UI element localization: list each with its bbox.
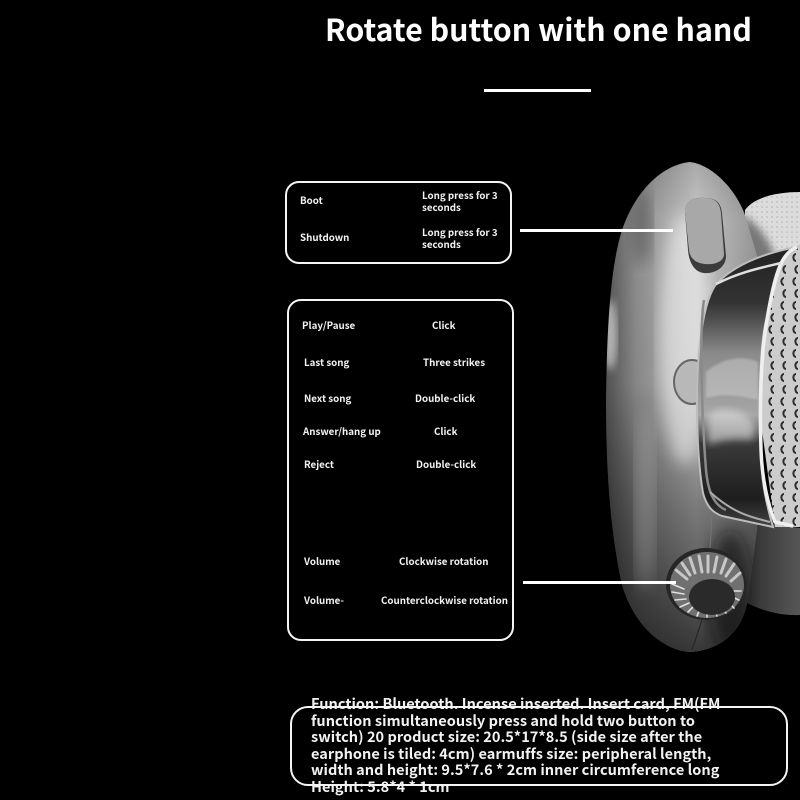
mesh grille	[758, 245, 800, 527]
label: volume up: Volume	[304, 554, 340, 568]
label: shutdown action: seconds	[422, 237, 461, 251]
label: boot: Boot	[300, 193, 323, 207]
action: click: Click	[432, 318, 455, 332]
text: specifications: earphone is tiled: 4cm) earmuffs size: peripheral length,	[311, 743, 711, 764]
text: specifications	[311, 693, 720, 797]
title underline	[484, 89, 591, 92]
rotary knob	[666, 548, 746, 620]
label: play/pause: Play/Pause	[302, 318, 355, 332]
pointer: rotary knob	[523, 581, 676, 584]
action: double-click: Double-click	[415, 391, 475, 405]
action: click: Click	[434, 424, 457, 438]
label: boot action: seconds	[422, 200, 461, 214]
text: specifications: switch) 20 product size: 20.5*17*8.5 (side size after the	[311, 726, 702, 747]
label: last song: Last song	[304, 355, 349, 369]
panel: specifications frame	[290, 706, 788, 786]
ear pad	[743, 192, 800, 300]
label: shutdown action	[422, 225, 498, 251]
text: specifications: Function: Bluetooth. Incense inserted. Insert card, FM(FM	[311, 693, 720, 714]
earcup shell	[603, 162, 770, 652]
panel: media controls	[287, 299, 514, 641]
chrome bezel	[697, 247, 797, 527]
panel: power controls	[285, 181, 512, 264]
label: boot action	[422, 188, 498, 214]
label: volume down: Volume-	[304, 593, 344, 607]
action: double-click: Double-click	[416, 457, 476, 471]
label: boot action: Long press for 3	[422, 188, 498, 202]
text: specifications: width and height: 9.5*7.6 * 2cm inner circumference long	[311, 759, 719, 780]
label: next song: Next song	[304, 391, 351, 405]
label: answer/hang up: Answer/hang up	[303, 424, 381, 438]
label: shutdown action: Long press for 3	[422, 225, 498, 239]
top button	[685, 198, 726, 273]
title: Rotate button with one hand	[325, 6, 752, 50]
label: reject: Reject	[304, 457, 334, 471]
action: three strikes: Three strikes	[423, 355, 485, 369]
text: specifications: function simultaneously press and hold two button to	[311, 710, 695, 731]
illustration: headphone earcup with buttons	[606, 162, 800, 652]
lower ear pad	[745, 520, 800, 615]
pointer: power button	[520, 229, 673, 232]
action: counterclockwise rotation: Counterclockwise rotation	[381, 593, 508, 607]
action: clockwise rotation: Clockwise rotation	[399, 554, 489, 568]
label: shutdown: Shutdown	[300, 230, 349, 244]
side connector	[674, 360, 710, 404]
text: specifications: Height: 5.8*4 * 1cm	[311, 776, 450, 797]
